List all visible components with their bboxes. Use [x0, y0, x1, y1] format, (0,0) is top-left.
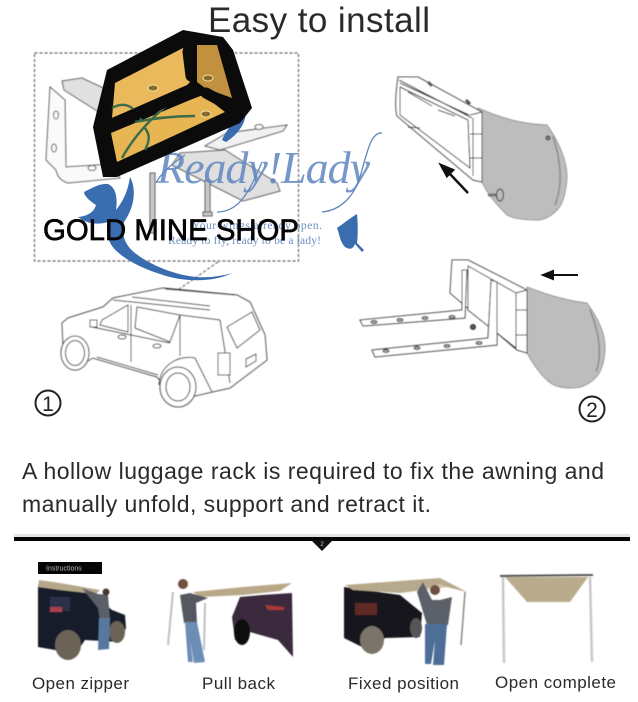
- step number 2: [580, 396, 604, 422]
- step number 2: 2: [586, 399, 598, 422]
- photo captions: Pull back: [202, 674, 276, 693]
- car line drawing: [61, 288, 267, 407]
- logo tagline: [168, 220, 322, 247]
- instructions tag: Instructions: [46, 566, 82, 572]
- icon: butterfly: [337, 214, 364, 252]
- awning bag: [527, 287, 605, 388]
- arrow: left slide: [543, 271, 578, 279]
- instructions tag: [38, 562, 102, 574]
- icon: rear bracket plate: [62, 78, 287, 201]
- badge gold facets: [112, 48, 190, 118]
- logo tagline: Your wings already open.: [192, 220, 322, 232]
- section divider: 2: [320, 542, 324, 548]
- photo 2: pull back: [168, 579, 293, 663]
- arrow: up-left slide: [441, 165, 468, 193]
- awning bag: [478, 108, 567, 220]
- step 2 top: awning sliding into rail: [396, 77, 567, 220]
- door handles: [118, 335, 126, 339]
- badge inner black bars: [109, 52, 232, 125]
- door lines: [92, 305, 180, 362]
- mirror: [90, 320, 97, 327]
- rail frame: [396, 77, 482, 182]
- roof rack: [113, 289, 235, 310]
- awning: [345, 578, 467, 593]
- photo captions: [32, 673, 616, 693]
- step number 1: 1: [42, 393, 54, 416]
- brackets: [360, 270, 467, 326]
- description text: manually unfold, support and retract it.: [22, 491, 431, 517]
- awning: [193, 583, 292, 597]
- car: [344, 587, 422, 652]
- tail light and plate: [218, 353, 230, 375]
- panel: bracket detail: [34, 53, 298, 317]
- description text: [22, 458, 604, 517]
- photo 3: fixed position: [344, 578, 467, 665]
- photo 4: open complete awning: [500, 575, 593, 663]
- floral swirl: [78, 177, 232, 280]
- photo captions: Fixed position: [348, 674, 459, 693]
- person: [417, 582, 452, 625]
- windows: [100, 305, 128, 332]
- icon: left L bracket: [46, 87, 263, 183]
- icon: bolts: [150, 173, 212, 233]
- person: [180, 593, 208, 623]
- dashed leader line: [154, 262, 218, 317]
- section divider: [14, 534, 630, 551]
- badge holes: [148, 75, 213, 117]
- bolt: [488, 194, 499, 196]
- logo flourishes: [156, 133, 382, 212]
- rear wheel: [160, 367, 196, 407]
- photo 1: open zipper: [38, 580, 126, 660]
- poles: [168, 592, 205, 650]
- gold mine shop badge: [93, 30, 252, 177]
- front wheel: [61, 336, 89, 370]
- rear wheel arch: [159, 357, 212, 392]
- person: [82, 588, 110, 620]
- car body: [62, 288, 267, 400]
- step 2 bottom: awning attached to brackets: [360, 260, 605, 388]
- gold mine shop label: GOLD MINE SHOP: [43, 214, 299, 247]
- photo captions: Open complete: [495, 673, 616, 692]
- logo tagline: Ready to fly, ready to be a lady!: [168, 235, 321, 247]
- badge outer shape: [93, 30, 252, 177]
- title: Easy to install: [208, 1, 430, 40]
- photo captions: Open zipper: [32, 674, 129, 693]
- badge leaf: [112, 103, 195, 158]
- description text: A hollow luggage rack is required to fix the awning and: [22, 458, 604, 484]
- rail frame: [450, 260, 527, 353]
- step number 1: [36, 390, 60, 416]
- watermark: Ready Lady logo: [78, 108, 382, 280]
- bracket holes: [371, 316, 482, 352]
- logo script text: Ready!Lady: [156, 142, 371, 193]
- car: [232, 593, 293, 657]
